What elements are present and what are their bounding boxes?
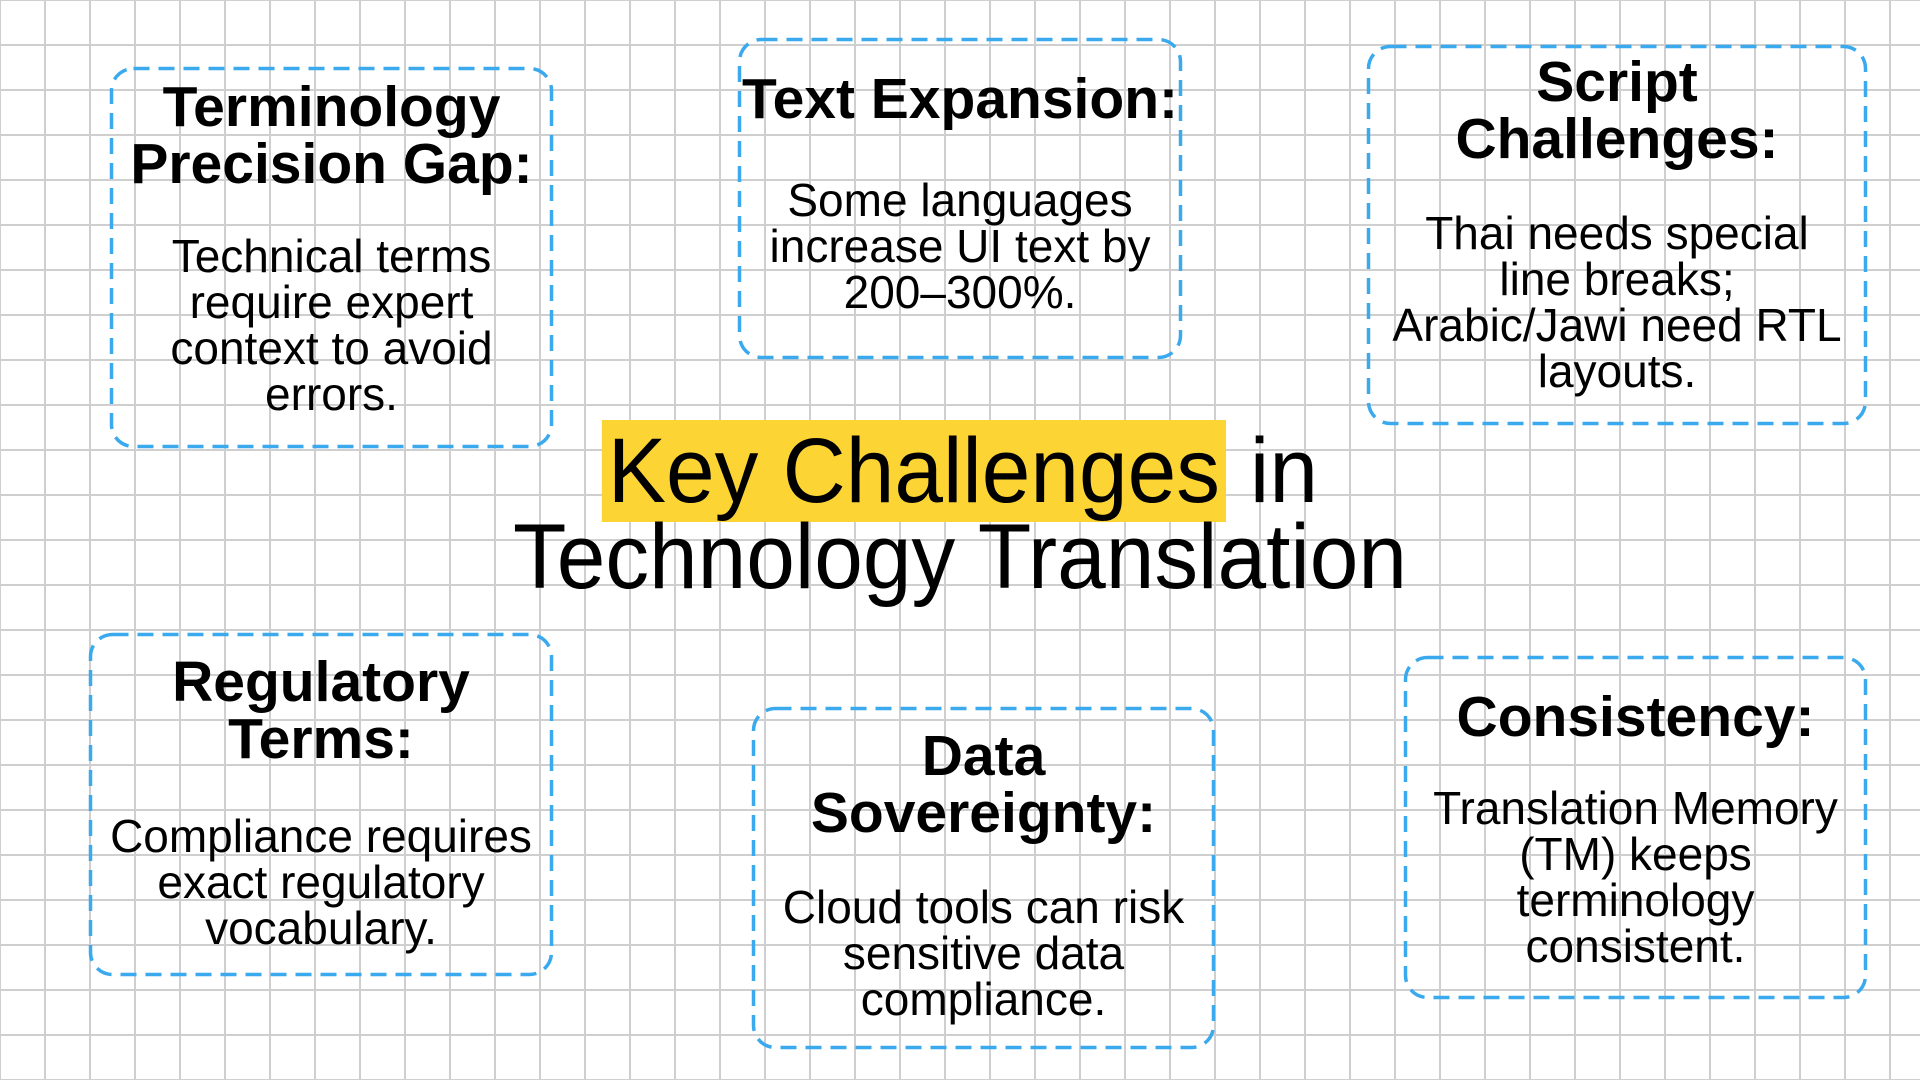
- heading: script challenges: Challenges:: [1455, 107, 1779, 171]
- panel: terminology precision gap: [110, 66, 554, 448]
- heading: terminology precision gap: Precision Gap:: [130, 132, 533, 196]
- text: script: line breaks;: [1499, 253, 1735, 305]
- text: consistency: consistent.: [1526, 920, 1745, 972]
- text: script: layouts.: [1538, 345, 1696, 397]
- heading: terminology precision gap: Terminology: [163, 75, 500, 139]
- text: terminology: [170, 230, 493, 420]
- title: Key Challenges in: [608, 420, 1318, 522]
- panel: data sovereignty: [752, 706, 1216, 1050]
- title: [513, 420, 1407, 608]
- text: data: sensitive data: [843, 927, 1124, 979]
- panel: script challenges: [1366, 44, 1868, 426]
- text: data: Cloud tools can risk: [783, 881, 1184, 933]
- heading: regulatory terms: Regulatory: [172, 650, 470, 714]
- text: consistency: (TM) keeps: [1519, 828, 1752, 880]
- text: regulatory: [110, 810, 532, 954]
- heading: terminology precision gap: [130, 75, 533, 196]
- text: expansion: 200–300%.: [844, 266, 1076, 318]
- panel: regulatory terms: [88, 632, 554, 976]
- text: expansion: increase UI text by: [770, 220, 1150, 272]
- heading: data sovereignty: Sovereignty:: [811, 781, 1156, 845]
- text: data: compliance.: [861, 973, 1106, 1025]
- text: terminology: Technical terms: [172, 230, 491, 282]
- text: expansion: [770, 174, 1150, 318]
- text: expansion: Some languages: [787, 174, 1133, 226]
- panel: consistency: [1404, 656, 1868, 1000]
- text: terminology: require expert: [190, 276, 473, 328]
- text: regulatory: Compliance requires: [110, 810, 532, 862]
- text: terminology: errors.: [265, 368, 398, 420]
- text: terminology: context to avoid: [170, 322, 493, 374]
- panel: text expansion: [738, 38, 1182, 360]
- heading: regulatory terms: [172, 650, 470, 771]
- heading: regulatory terms: Terms:: [228, 707, 414, 771]
- heading: text expansion: Text Expansion:: [742, 67, 1178, 131]
- text: script: Thai needs special: [1425, 207, 1809, 259]
- text: script: Arabic/Jawi need RTL: [1392, 299, 1842, 351]
- text: consistency: Translation Memory: [1433, 782, 1838, 834]
- text: script: [1392, 207, 1842, 397]
- text: consistency: [1433, 782, 1838, 972]
- text: regulatory: exact regulatory: [157, 856, 485, 908]
- heading: script challenges: [1455, 50, 1779, 171]
- heading: data sovereignty: Data: [922, 724, 1045, 788]
- heading: script challenges: Script: [1536, 50, 1698, 114]
- heading: consistency: Consistency:: [1457, 685, 1814, 749]
- title: Technology Translation: [513, 506, 1407, 608]
- text: regulatory: vocabulary.: [205, 902, 437, 954]
- heading: data sovereignty: [811, 724, 1156, 845]
- text: consistency: terminology: [1517, 874, 1754, 926]
- text: data: [783, 881, 1184, 1025]
